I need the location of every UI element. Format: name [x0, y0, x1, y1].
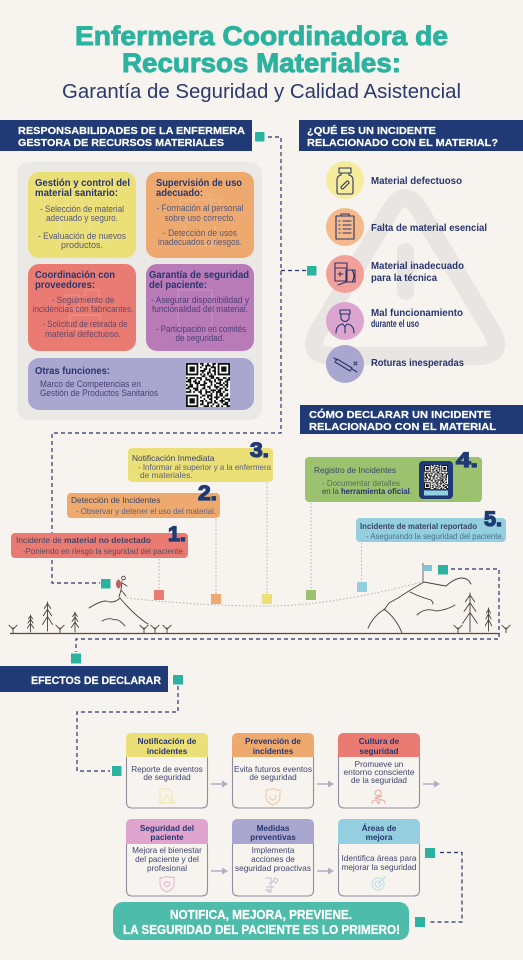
panel: responsabilidades [17, 162, 262, 420]
card: gestion y control: material sanitario: [35, 187, 118, 199]
connector: steps to effects [71, 565, 499, 664]
card: medidas preventivas [232, 819, 314, 896]
heading: como declarar [300, 405, 523, 434]
card: cultura de seguridad [338, 733, 420, 808]
icon: report [160, 789, 175, 803]
card: medidas preventivas: Medidas [257, 824, 290, 833]
card: supervision: Supervisión de uso [156, 177, 242, 189]
card: seguridad del paciente: Seguridad del [140, 824, 194, 833]
step 3: - Informar al superior y a la enfermera [138, 462, 271, 472]
step 4: en la herramienta oficial. [322, 486, 412, 496]
step 3: de materiales. [140, 470, 193, 480]
card: medidas preventivas: seguridad proactivas [235, 864, 311, 873]
QR code badge [419, 461, 453, 499]
step 2: - Observar y detener el uso del material. [76, 506, 216, 516]
step 5 [356, 508, 506, 542]
card: garantia: de seguridad. [176, 333, 224, 343]
icon: pill bottle [326, 161, 364, 199]
card: areas de mejora [338, 819, 420, 896]
step 2: Detección de Incidentes [71, 495, 160, 505]
step 1 [11, 523, 188, 558]
card: garantia: - Participación en comités [156, 324, 246, 334]
heading: que es un incidente [299, 120, 523, 151]
banner: closing message: LA SEGURIDAD DEL PACIENTE ES LO PRIMERO! [123, 923, 400, 937]
card: garantia: - Asegurar disponibilidad y [151, 295, 249, 305]
card: cultura de seguridad: de la seguridad [351, 776, 407, 785]
card: notificacion de incidentes: de seguridad [143, 773, 191, 782]
label: falta de material: Falta de material esencial [371, 223, 487, 234]
heading: responsabilidades: RESPONSABILIDADES DE LA ENFERMERA [18, 125, 245, 137]
card: gestion y control: - Selección de material [40, 204, 124, 214]
card: prevencion de incidentes: de seguridad [249, 773, 297, 782]
icon: target [372, 876, 386, 890]
connector: cards to banner [415, 848, 462, 927]
heading: efectos de declarar [0, 666, 168, 692]
card: supervision: adecuado: [156, 187, 203, 199]
icon: hiker [116, 576, 127, 597]
card: prevencion de incidentes [232, 733, 314, 808]
title: Enfermera Coordinadora de [75, 21, 448, 51]
step 3 [128, 439, 273, 482]
step 4 [305, 449, 482, 502]
step 3: Notificación Inmediata [132, 453, 215, 463]
label: mal funcionamiento: durante el uso [371, 319, 419, 330]
card: cultura de seguridad: Cultura de [359, 737, 400, 746]
card: gestion y control [28, 172, 136, 258]
step 3: 3. [250, 439, 269, 462]
card: supervision: sobre uso correcto. [164, 213, 236, 223]
card: coordinacion: proveedores: [35, 279, 95, 291]
title [75, 21, 448, 78]
list: tipos de incidente [326, 161, 487, 383]
card: supervision: - Detección de usos [163, 228, 237, 238]
heading: como declarar: CÓMO DECLARAR UN INCIDENTE [309, 408, 491, 421]
card: otras funciones: Marco de Competencias en [40, 379, 141, 389]
heading: como declarar: RELACIONADO CON EL MATERIAL [309, 421, 497, 433]
timeline dotted lines [127, 483, 422, 606]
card: seguridad del paciente: paciente [150, 833, 184, 842]
step 5: Incidente de material reportado [360, 521, 477, 531]
label: mal funcionamiento: Mal funcionamiento [371, 308, 463, 319]
icon: shield [266, 788, 280, 805]
connector: top section to steps [52, 132, 316, 588]
icon: clipboard [326, 208, 364, 246]
subtitle: Garantía de Seguridad y Calidad Asistencial [62, 81, 461, 103]
step 5: - Asegurando la seguridad del paciente. [366, 531, 504, 541]
heading: responsabilidades: GESTORA DE RECURSOS MATERIALES [18, 137, 224, 149]
card: prevencion de incidentes: incidentes [253, 747, 294, 756]
connector: effects heading to cards [77, 675, 183, 776]
label: material inadecuado: Material inadecuado [371, 261, 464, 272]
timeline markers [154, 582, 367, 604]
icon: health worker [326, 302, 364, 340]
icon: flag [423, 563, 432, 582]
icon: bandage roll [326, 255, 364, 293]
step 2 [67, 482, 220, 518]
card: medidas preventivas: acciones de [251, 855, 295, 864]
label: material inadecuado [371, 261, 464, 284]
card: notificacion de incidentes: Reporte de eventos [131, 765, 203, 774]
card: gestion y control: Gestión y control del [35, 177, 130, 189]
card: otras funciones [28, 358, 254, 410]
step 2: 2. [198, 482, 217, 505]
card: cultura de seguridad: entorno consciente [344, 768, 415, 777]
card: coordinacion: - Solicitud de retirada de [42, 319, 128, 329]
heading: responsabilidades [0, 120, 252, 151]
card: coordinacion: - Seguimiento de [52, 295, 114, 305]
card: otras funciones: Gestión de Productos Sanitarios [40, 388, 158, 398]
card: coordinacion: material defectuoso. [45, 329, 121, 339]
card: notificacion de incidentes: Notificación de [138, 737, 197, 746]
card: gestion y control: adecuado y seguro. [46, 213, 118, 223]
icon: heart shield [160, 876, 174, 892]
card: prevencion de incidentes: Evita futuros eventos [234, 765, 312, 774]
card: otras funciones: Otras funciones: [35, 365, 110, 377]
card: supervision: inadecuados o riesgos. [158, 237, 242, 247]
icon: people [372, 790, 385, 804]
step 1: -Poniendo en riesgo la seguridad del paciente. [23, 546, 185, 556]
icon: warning triangle watermark [314, 198, 496, 356]
title: Recursos Materiales: [122, 48, 401, 78]
card: cultura de seguridad: Promueve un [355, 760, 404, 769]
label: mal funcionamiento [371, 308, 463, 330]
card: coordinacion: Coordinación con [35, 269, 115, 281]
card: areas de mejora: mejorar la seguridad [342, 863, 417, 872]
illustration: landscape [9, 563, 510, 634]
card: gestion y control: productos. [61, 240, 103, 250]
card: garantia: del paciente: [149, 279, 207, 291]
card: coordinacion [28, 264, 136, 351]
card: areas de mejora: Identifica áreas para [342, 854, 417, 863]
card: supervision: - Formación al personal [156, 203, 244, 213]
card: seguridad del paciente: del paciente y del [135, 855, 199, 864]
card: garantia [146, 264, 254, 351]
card: seguridad del paciente [126, 819, 208, 896]
card: seguridad del paciente: profesional [147, 864, 187, 873]
step 4: 4. [456, 449, 478, 472]
card: gestion y control: - Evaluación de nuevos [38, 231, 126, 241]
label: roturas: Roturas inesperadas [371, 358, 465, 369]
step 5: 5. [484, 508, 502, 531]
card: areas de mejora: mejora [366, 833, 393, 842]
step 4: Registro de Incidentes [314, 465, 396, 475]
icon: syringe [326, 345, 364, 383]
card: seguridad del paciente: Mejora el bienestar [132, 846, 202, 855]
card: notificacion de incidentes [126, 733, 208, 808]
QR code [186, 363, 230, 407]
icon: tap [265, 878, 278, 892]
heading: que es un incidente: RELACIONADO CON EL MATERIAL? [307, 137, 498, 149]
heading: que es un incidente: ¿QUÉ ES UN INCIDENTE [307, 124, 436, 137]
label: material inadecuado: para la técnica [371, 273, 438, 284]
card: coordinacion: incidencias con fabricantes. [32, 304, 134, 314]
card: notificacion de incidentes: incidentes [147, 747, 188, 756]
step 1: 1. [168, 523, 186, 546]
step 1: Incidente de material no detectado [16, 535, 151, 545]
step 4: - Documentar detalles [322, 478, 400, 488]
card: supervision [146, 172, 254, 258]
card: garantia: Garantía de seguridad [149, 269, 249, 281]
banner: closing message [113, 902, 409, 940]
card: garantia: funcionalidad del material. [152, 304, 248, 314]
card: medidas preventivas: Implementa [252, 846, 295, 855]
card: prevencion de incidentes: Prevención de [245, 737, 301, 746]
card: medidas preventivas: preventivas [250, 833, 296, 842]
arrows between cards [211, 780, 440, 874]
card: cultura de seguridad: seguridad [359, 747, 399, 756]
heading: efectos de declarar: EFECTOS DE DECLARAR [31, 675, 161, 687]
banner: closing message: NOTIFICA, MEJORA, PREVIENE. [170, 908, 352, 922]
card: areas de mejora: Áreas de [362, 823, 397, 833]
label: material defectuoso: Material defectuoso [371, 176, 462, 187]
